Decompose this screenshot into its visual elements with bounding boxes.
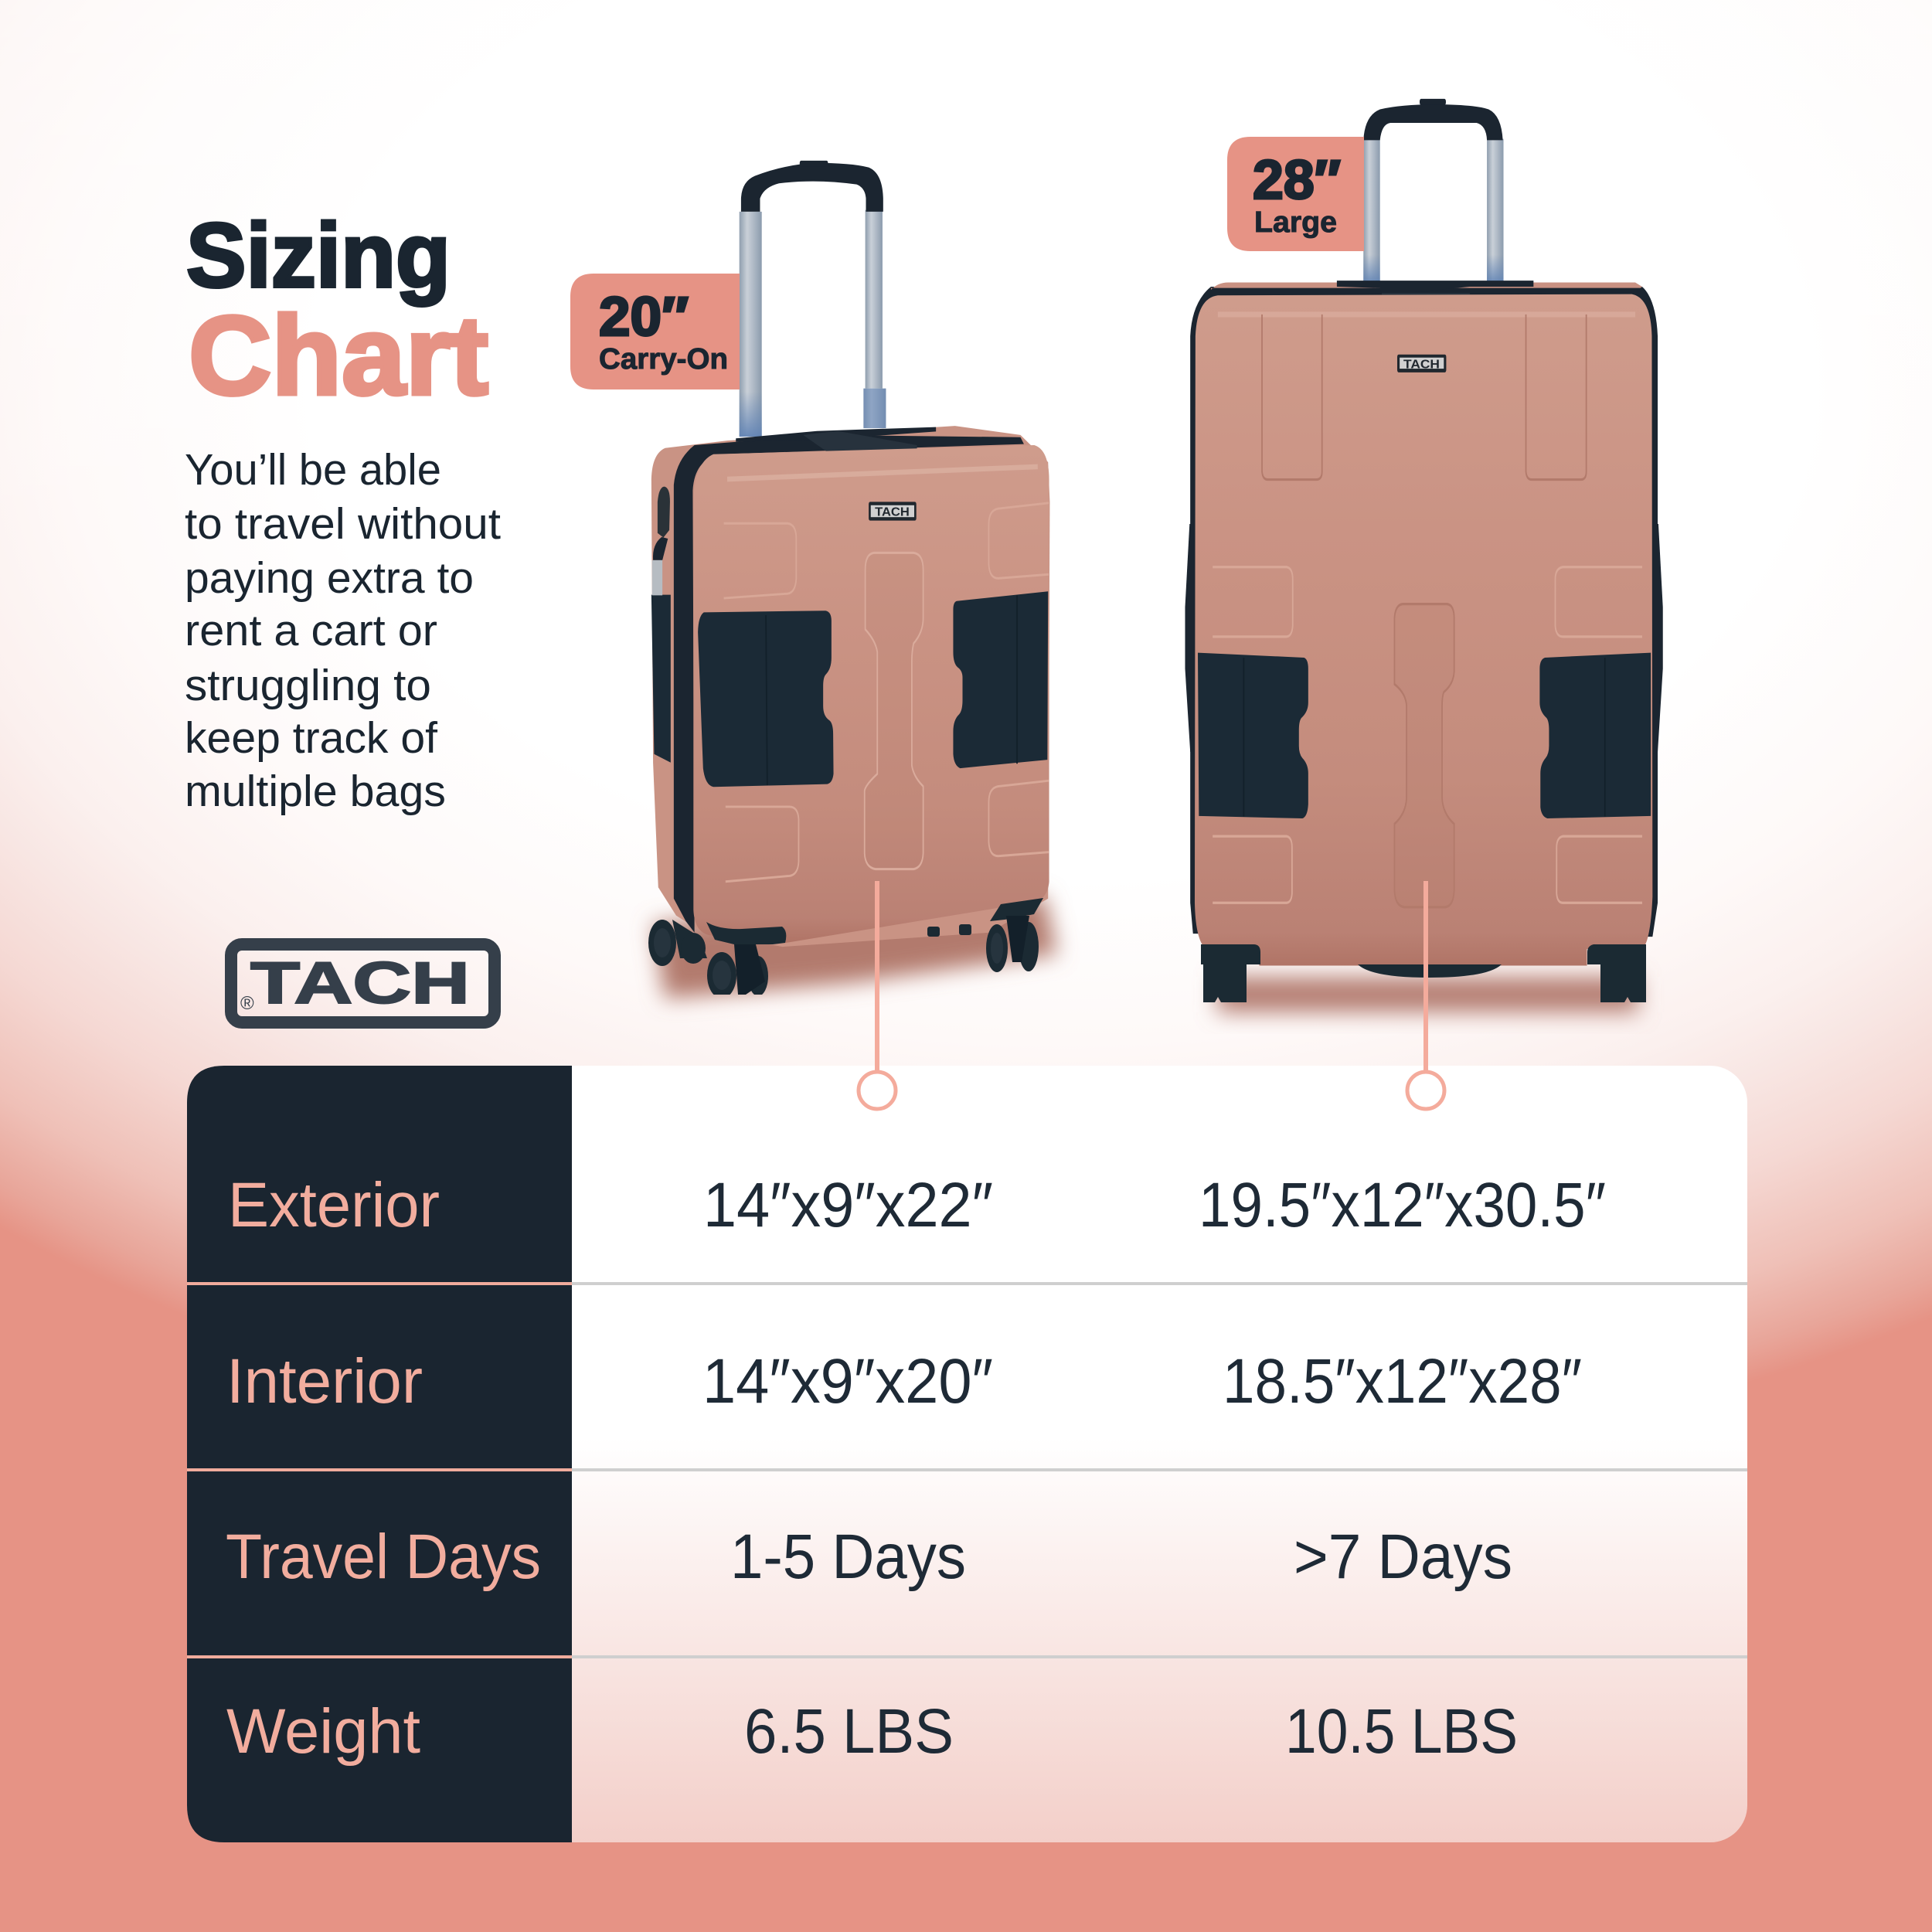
large face — [1195, 294, 1652, 966]
black wrap patches — [698, 611, 834, 787]
description text: to travel without — [185, 499, 501, 549]
dog-bone emboss — [865, 553, 923, 869]
row: travel days: Travel Days — [226, 1522, 541, 1592]
row: interior — [226, 1346, 1582, 1417]
sizing table — [187, 1066, 1747, 1842]
row: weight — [226, 1696, 1518, 1767]
bumpers and wheels — [648, 898, 1043, 998]
row: interior: 18.5″x12″x28″ — [1223, 1346, 1582, 1417]
description text: paying extra to — [185, 553, 474, 603]
badge: 28 inch large — [1227, 137, 1364, 251]
row: interior: Interior — [226, 1346, 423, 1417]
large dog-bone emboss — [1394, 604, 1454, 907]
large brand plate — [1397, 355, 1446, 372]
badge: 28 inch large: 28″ — [1253, 150, 1341, 211]
suitcase: 28 inch large — [1185, 99, 1663, 1012]
badge: 20 inch carry-on: Carry-On — [599, 343, 728, 376]
row: exterior: 19.5″x12″x30.5″ — [1199, 1170, 1606, 1240]
description text — [185, 445, 501, 816]
title: Sizing — [186, 205, 451, 307]
row: weight: 6.5 LBS — [744, 1696, 954, 1767]
row: travel days: >7 Days — [1294, 1522, 1512, 1592]
logo: TACH: TACH — [250, 951, 470, 1016]
suitcase: 20 inch carry-on — [648, 161, 1057, 998]
logo: TACH: ® — [240, 993, 254, 1014]
description text: keep track of — [185, 713, 437, 763]
badge: 20 inch carry-on: 20″ — [599, 287, 689, 348]
large bumpers and wheels — [1201, 944, 1646, 1002]
row: travel days — [226, 1522, 1512, 1592]
badge: 28 inch large: Large — [1254, 206, 1337, 239]
leader line: carry-on — [859, 881, 896, 1109]
row: exterior: Exterior — [228, 1170, 440, 1240]
suitcase face — [693, 445, 1049, 943]
row: travel days: 1-5 Days — [730, 1522, 966, 1592]
description text: rent a cart or — [185, 606, 437, 655]
description text: multiple bags — [185, 767, 446, 816]
description text: You’ll be able — [185, 445, 441, 495]
brand plate: TACH — [875, 505, 910, 519]
row: exterior: 14″x9″x22″ — [703, 1170, 993, 1240]
large brand plate: TACH — [1403, 356, 1440, 371]
title — [186, 205, 488, 418]
logo: TACH — [231, 944, 495, 1022]
row: interior: 14″x9″x20″ — [702, 1346, 993, 1417]
row: weight: Weight — [226, 1696, 420, 1767]
description text: struggling to — [185, 661, 431, 710]
leader line: large — [1407, 881, 1444, 1109]
row: weight: 10.5 LBS — [1285, 1696, 1518, 1767]
label column — [187, 1066, 572, 1842]
badge: 20 inch carry-on — [570, 274, 740, 389]
brand plate — [869, 502, 917, 521]
title: Chart — [189, 293, 488, 418]
large wrap patches — [1198, 653, 1308, 818]
row: exterior — [228, 1170, 1606, 1240]
